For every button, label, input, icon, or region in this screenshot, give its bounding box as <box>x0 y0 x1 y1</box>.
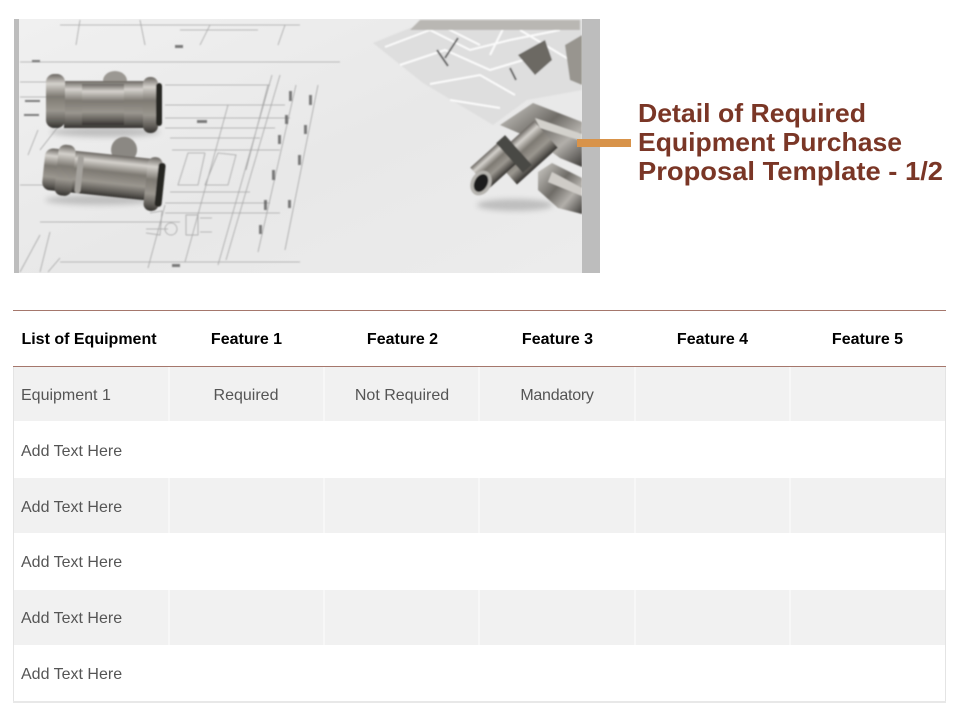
row labels: Add Text Here <box>21 610 122 627</box>
connector bar <box>577 139 631 147</box>
header row: Feature 2 <box>367 331 438 348</box>
title: Proposal Template - 1/2 <box>638 156 943 186</box>
title: Equipment Purchase <box>638 127 902 157</box>
table: equipment features <box>13 310 946 703</box>
icon: tee pipe fitting <box>466 103 582 199</box>
header row: Feature 3 <box>522 331 593 348</box>
image panel: pipe fittings on blueprints <box>14 19 600 273</box>
row labels: Add Text Here <box>21 554 122 571</box>
row labels <box>21 443 122 683</box>
header row: Feature 1 <box>211 331 282 348</box>
title <box>638 98 943 186</box>
icon: upper pipe fitting <box>46 71 162 133</box>
title: Detail of Required <box>638 98 866 128</box>
icon: right pipe fitting <box>538 163 582 214</box>
plastic wrap bag <box>373 20 582 125</box>
row: Equipment 1 <box>21 387 594 404</box>
header row: List of Equipment <box>21 331 157 348</box>
header row <box>21 331 903 348</box>
header row: Feature 5 <box>832 331 903 348</box>
row labels: Add Text Here <box>21 499 122 516</box>
row labels: Add Text Here <box>21 666 122 683</box>
shadows under the parts <box>45 127 553 211</box>
blueprint drawing lines <box>20 20 340 272</box>
row: Equipment 1: Equipment 1 <box>21 387 111 404</box>
row labels: Add Text Here <box>21 443 122 460</box>
header row: Feature 4 <box>677 331 748 348</box>
row: Equipment 1: Required <box>214 387 278 404</box>
icon: lower pipe fitting <box>40 129 168 212</box>
row: Equipment 1: Mandatory <box>520 387 594 404</box>
row: Equipment 1: Not Required <box>355 387 449 404</box>
